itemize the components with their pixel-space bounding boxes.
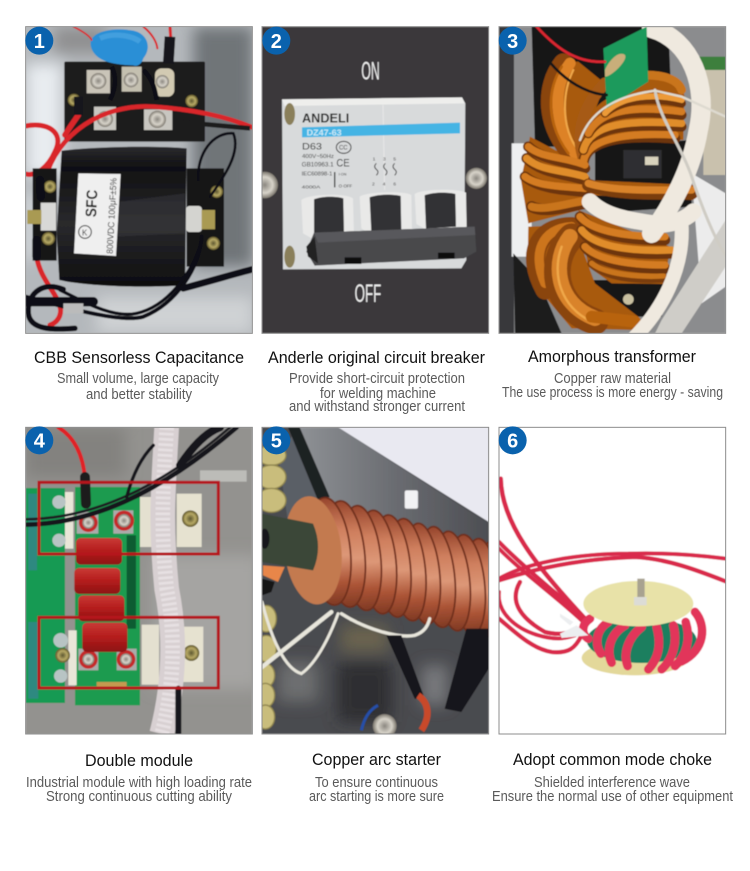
description 3: [502, 370, 723, 401]
breaker body: 2 4 6: [372, 181, 396, 187]
white wires: [262, 602, 430, 674]
description 4: Industrial module with high loading rate: [26, 774, 252, 791]
description 3: Copper raw material: [554, 370, 671, 387]
panel 4: double module photo: [25, 426, 260, 734]
copper coil masses: [521, 62, 693, 330]
terminal screws: [77, 510, 137, 670]
caption 1: [34, 348, 244, 403]
wires: [535, 27, 726, 255]
caption 5: [309, 750, 444, 805]
description 6: [492, 774, 734, 805]
red capacitors: [74, 538, 127, 652]
label on capacitor: 800VDC 100μF±5%: [105, 178, 119, 254]
badge 3: 3: [507, 31, 518, 53]
breaker body: I·ON: [339, 172, 347, 176]
description 2: [289, 370, 466, 415]
heading 3: Amorphous transformer: [528, 347, 696, 366]
heading 5: Copper arc starter: [312, 750, 441, 769]
coil end face: [286, 496, 342, 606]
description 4: [26, 774, 252, 805]
dark tube: [262, 514, 318, 570]
panel 2: circuit breaker photo: [251, 27, 489, 333]
panel 3: amorphous transformer photo: [499, 27, 726, 337]
badge 4: [25, 426, 53, 454]
badge 3: [499, 27, 527, 55]
badge 4: 4: [34, 431, 45, 453]
frame: [499, 427, 726, 734]
black wires: [26, 133, 252, 329]
breaker body: D63: [302, 142, 322, 152]
badge 2: 2: [271, 31, 282, 53]
breaker body: O·OFF: [339, 183, 352, 188]
braided tube: [162, 427, 173, 734]
red highlight boxes: [39, 482, 218, 688]
frame: [499, 27, 726, 333]
frame: [262, 427, 489, 734]
badge 1: [25, 27, 53, 55]
description 4: Strong continuous cutting ability: [46, 788, 232, 805]
icon: blue varistor: [91, 29, 148, 66]
heading 1: CBB Sensorless Capacitance: [34, 348, 244, 367]
circuit boards: [26, 487, 140, 705]
frame: [262, 27, 489, 333]
breaker body: 1 3 5: [373, 156, 396, 162]
heading 2: Anderle original circuit breaker: [268, 348, 485, 367]
OFF label: OFF: [355, 281, 381, 308]
heading 4: Double module: [85, 751, 193, 770]
badge 2: [262, 27, 290, 55]
screws: [251, 168, 487, 198]
heading 6: Adopt common mode choke: [513, 750, 712, 769]
description 6: Shielded interference wave: [534, 774, 690, 791]
label on capacitor: [74, 173, 121, 256]
wires: [26, 427, 237, 734]
breaker body: CE: [336, 158, 350, 170]
breaker body: CC: [339, 146, 348, 152]
mounting plate: [33, 168, 224, 267]
panel 2: circuit breaker photo: ON: [361, 58, 380, 85]
caption 3: [502, 347, 723, 401]
description 2: for welding machine: [320, 385, 436, 402]
red wires: [26, 27, 252, 325]
rocker switches: [301, 190, 476, 266]
description 2: and withstand stronger current: [289, 398, 466, 415]
copper coil: [279, 493, 517, 641]
caption 2: [268, 348, 485, 415]
breaker body: IEC60898-1: [302, 172, 332, 178]
description 5: To ensure continuous: [315, 774, 438, 791]
description 5: [309, 774, 444, 805]
badge 6: [499, 426, 527, 454]
frame: [26, 427, 252, 734]
panel 6: common mode choke photo: [499, 426, 726, 734]
description 1: and better stability: [86, 386, 192, 403]
terminal block: [64, 62, 205, 142]
badge 5: [262, 426, 290, 454]
description 2: Provide short-circuit protection: [289, 370, 465, 387]
black sleeve: [168, 37, 170, 63]
red lead wires: [499, 479, 726, 652]
label on capacitor: SFC: [83, 189, 101, 218]
brand text: ANDELI: [302, 112, 349, 126]
description 5: arc starting is more sure: [309, 788, 444, 805]
panel 1: CBB capacitor photo: [25, 27, 253, 333]
copper coils: [525, 63, 692, 322]
breaker body: [282, 97, 466, 269]
caption 4: [26, 751, 252, 805]
panel 5: copper arc starter photo: [256, 426, 517, 738]
description 1: [57, 370, 219, 403]
choke: [560, 579, 702, 675]
label on capacitor: K: [82, 228, 88, 237]
circuit board: [603, 27, 648, 108]
white module housings: [52, 492, 203, 685]
badge 5: 5: [271, 431, 282, 453]
breaker body: 400V~50Hz: [302, 154, 334, 160]
corrugated insulator: [262, 446, 288, 730]
caption 6: [492, 750, 734, 805]
capacitor body: [57, 147, 187, 287]
badge 6: 6: [507, 431, 518, 453]
white insulation sleeves: [590, 28, 701, 337]
breaker body: 4000A: [302, 184, 321, 190]
bolts: [27, 180, 223, 250]
frame: [26, 27, 252, 333]
lower components: [361, 629, 489, 738]
badge 1: 1: [34, 31, 45, 53]
breaker body: DZ47-63: [307, 128, 342, 138]
description 1: Small volume, large capacity: [57, 370, 219, 387]
breaker body: GB10963.1: [302, 162, 334, 169]
